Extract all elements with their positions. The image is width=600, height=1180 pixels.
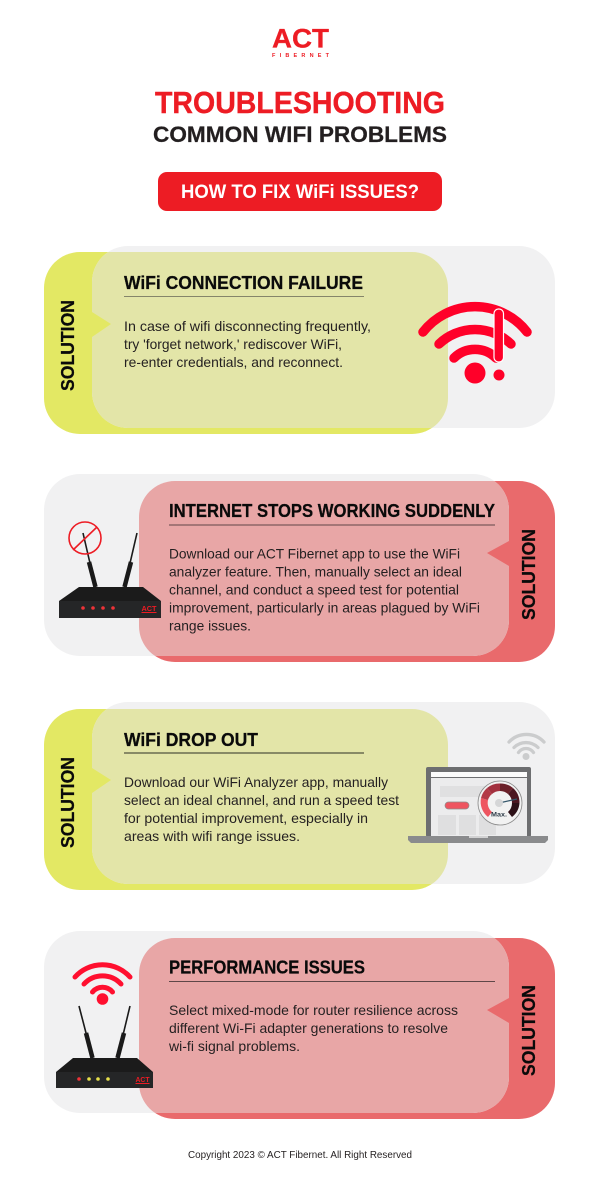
title: [153, 85, 447, 147]
icon: router with no signal: [59, 522, 161, 618]
solution label: SOLUTION: [519, 529, 539, 620]
body text: re-enter credentials, and reconnect.: [124, 354, 343, 370]
panel: WiFi drop out: [44, 702, 555, 890]
title: COMMON WIFI PROBLEMS: [153, 122, 447, 147]
icon: red wifi: [75, 965, 130, 1005]
logo: ACT Fibernet: FIBERNET: [272, 53, 330, 59]
icon: laptop speed test: Max.: [491, 812, 507, 818]
panel: WiFi connection failure: [44, 246, 555, 434]
body text: [169, 546, 480, 634]
body text: wi-fi signal problems.: [168, 1038, 300, 1054]
heading: INTERNET STOPS WORKING SUDDENLY: [169, 500, 496, 521]
title: TROUBLESHOOTING: [155, 85, 445, 120]
body text: [124, 774, 399, 844]
panel: Internet stops working suddenly: [44, 474, 555, 662]
heading: PERFORMANCE ISSUES: [169, 956, 365, 978]
icon: gray wifi: [509, 734, 544, 760]
body text: Download our WiFi Analyzer app, manually: [124, 774, 388, 790]
icon: router with signal: [56, 1006, 153, 1088]
solution label: SOLUTION: [58, 300, 78, 391]
body text: select an ideal channel, and run a speed test: [124, 792, 399, 808]
logo: ACT Fibernet: ACT: [272, 24, 330, 54]
body text: different Wi-Fi adapter generations to resolve: [169, 1020, 448, 1036]
solution label: SOLUTION: [58, 757, 78, 848]
body text: [124, 318, 371, 370]
body text: [168, 1002, 458, 1054]
body text: areas with wifi range issues.: [124, 828, 300, 844]
icon: router with signal: ACT: [136, 1075, 150, 1084]
heading: WiFi CONNECTION FAILURE: [124, 272, 363, 293]
panel: Performance issues: [44, 931, 555, 1119]
body text: Download our ACT Fibernet app to use the WiFi: [169, 546, 460, 562]
button: how to fix: [158, 172, 442, 211]
button: how to fix: HOW TO FIX WiFi ISSUES?: [181, 181, 419, 203]
body text: Select mixed-mode for router resilience across: [169, 1002, 458, 1018]
body text: for potential improvement, especially in: [124, 810, 368, 826]
body text: range issues.: [169, 618, 251, 634]
icon: router with no signal: ACT: [142, 604, 157, 613]
body text: In case of wifi disconnecting frequently,: [124, 318, 371, 334]
body text: improvement, particularly in areas plagued by WiFi: [169, 600, 480, 616]
body text: analyzer feature. Then, manually select an ideal: [169, 564, 462, 580]
footer copyright: Copyright 2023 © ACT Fibernet. All Right Reserved: [188, 1149, 412, 1161]
icon: laptop speed test: [408, 767, 548, 843]
icon: wifi warning: [423, 307, 527, 384]
body text: channel, and conduct a speed test for potential: [169, 582, 459, 598]
body text: try 'forget network,' rediscover WiFi,: [124, 336, 342, 352]
solution label: SOLUTION: [519, 985, 539, 1076]
heading: WiFi DROP OUT: [124, 729, 259, 750]
